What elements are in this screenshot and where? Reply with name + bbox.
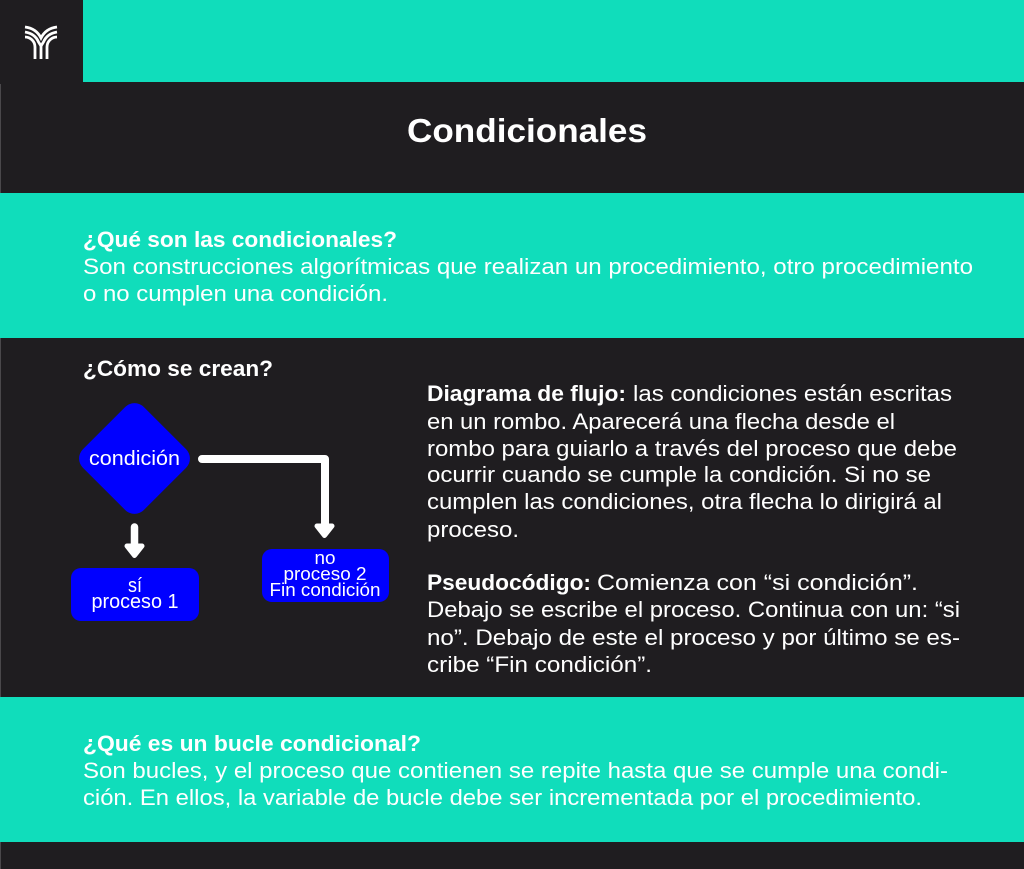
panel: conditional loop — [0, 697, 1024, 842]
heading: conditional loop: ¿Qué es un bucle condicional? — [83, 731, 421, 756]
title: Condicionales — [407, 112, 647, 149]
icon: logo — [25, 27, 57, 59]
text block: flowchart explanation: las condiciones están escritas — [633, 381, 952, 406]
text block: flowchart explanation: en un rombo. Aparecerá una flecha desde el — [427, 409, 895, 434]
text block: flowchart explanation: Diagrama de flujo: — [427, 381, 626, 406]
heading: what are conditionals: ¿Qué son las condicionales? — [83, 227, 397, 252]
text block: loop definition — [83, 758, 948, 810]
flowchart — [71, 398, 389, 621]
diamond: condition: condición — [89, 447, 180, 470]
text block: flowchart explanation: rombo para guiarlo a través del proceso que debe — [427, 436, 957, 461]
box: yes process 1: sí — [128, 575, 142, 597]
panel: what are conditionals — [0, 193, 1024, 338]
text block: pseudocode explanation: Debajo se escribe el proceso. Continua con un: “si — [427, 597, 960, 622]
diamond: condition — [74, 398, 195, 519]
text block: flowchart explanation — [427, 381, 957, 542]
box: no process 2: Fin condición — [270, 580, 380, 600]
text block: flowchart explanation: proceso. — [427, 517, 519, 542]
header band — [83, 0, 1024, 82]
text block: loop definition: Son bucles, y el proceso que contienen se repite hasta que se cumple una condi- — [83, 758, 948, 783]
box: yes process 1: proceso 1 — [92, 591, 178, 613]
box: yes process 1 — [71, 568, 199, 621]
text block: definition: o no cumplen una condición. — [83, 281, 388, 306]
box: no process 2 — [262, 548, 389, 602]
text block: pseudocode explanation: Comienza con “si condición”. — [597, 570, 918, 595]
text block: definition: Son construcciones algorítmicas que realizan un procedimiento, otro procedimiento — [83, 254, 973, 279]
text block: definition — [83, 254, 973, 306]
arrow: no — [202, 459, 332, 536]
arrow: yes — [127, 527, 142, 556]
text block: pseudocode explanation: no”. Debajo de este el proceso y por último se es- — [427, 625, 960, 650]
text block: pseudocode explanation — [427, 570, 960, 677]
box: no process 2: no — [314, 548, 336, 568]
box: no process 2: proceso 2 — [284, 564, 366, 584]
text block: flowchart explanation: ocurrir cuando se cumple la condición. Si no se — [427, 462, 931, 487]
text block: loop definition: ción. En ellos, la variable de bucle debe ser incrementada por el procedimiento. — [83, 785, 922, 810]
heading: how are they created: ¿Cómo se crean? — [83, 356, 273, 381]
text block: pseudocode explanation: Pseudocódigo: — [427, 570, 591, 595]
text block: flowchart explanation: cumplen las condiciones, otra flecha lo dirigirá al — [427, 489, 942, 514]
text block: pseudocode explanation: cribe “Fin condición”. — [427, 652, 652, 677]
